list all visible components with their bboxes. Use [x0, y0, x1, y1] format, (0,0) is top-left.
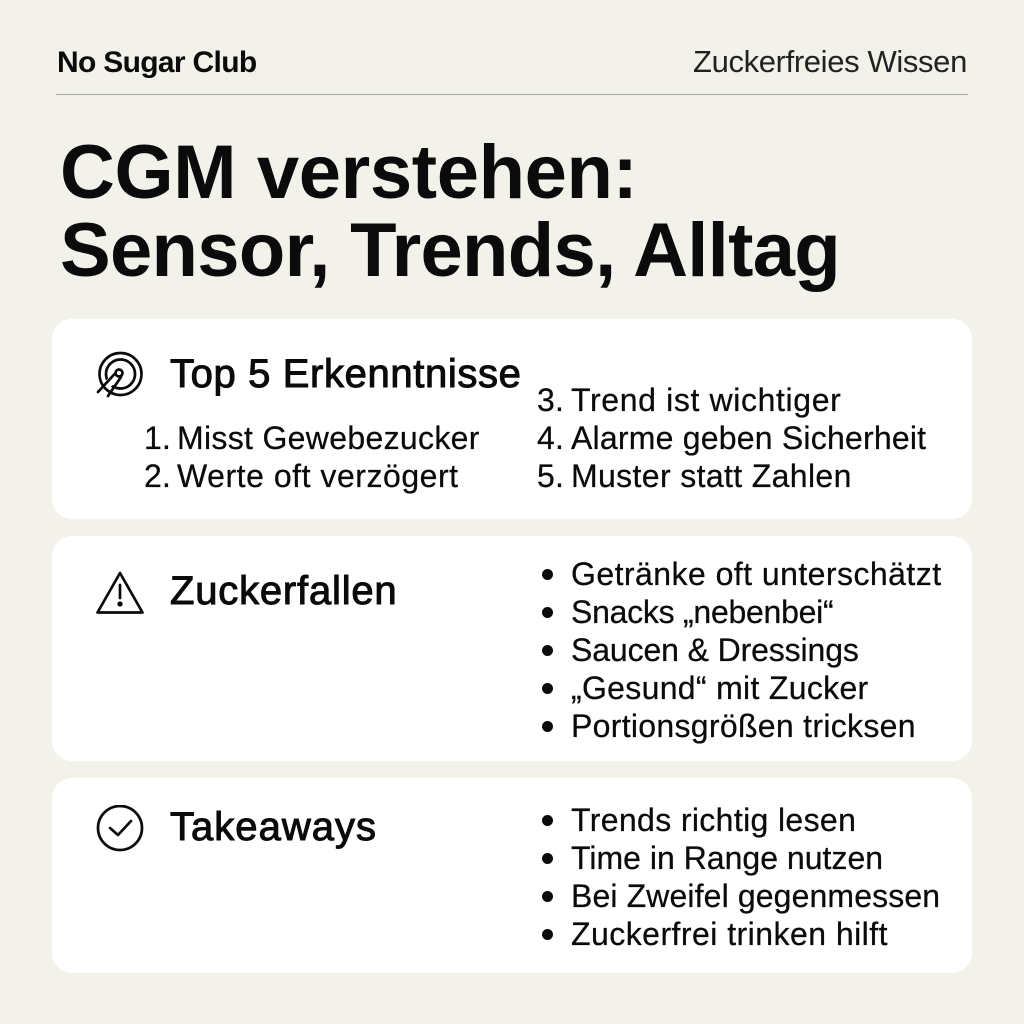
header tagline: Zuckerfreies Wissen	[693, 44, 967, 79]
list left	[144, 420, 480, 494]
item 1: Misst Gewebezucker	[177, 420, 480, 456]
icon: warning triangle	[96, 572, 144, 614]
item 4: 4.	[537, 420, 564, 456]
title: Sensor, Trends, Alltag	[60, 208, 840, 293]
bullet 2: Time in Range nutzen	[571, 840, 883, 876]
list	[542, 556, 942, 744]
bullet 4: „Gesund“ mit Zucker	[571, 670, 869, 706]
bullet 3: Saucen & Dressings	[571, 632, 859, 668]
item 2: Werte oft verzögert	[177, 458, 459, 494]
panel: Takeaways	[52, 778, 972, 973]
bullet 1: Getränke oft unterschätzt	[571, 556, 942, 592]
list right	[537, 382, 926, 494]
bullet 3: Bei Zweifel gegenmessen	[571, 878, 940, 914]
heading: Top 5 Erkenntnisse	[170, 352, 522, 396]
bullet 2: Snacks „nebenbei“	[571, 594, 833, 630]
item 5: Muster statt Zahlen	[571, 458, 852, 494]
heading: Takeaways	[170, 805, 377, 849]
heading: Zuckerfallen	[170, 569, 397, 613]
icon: check circle	[96, 805, 144, 852]
title	[60, 130, 840, 293]
panel: Top 5 Erkenntnisse	[52, 319, 972, 519]
panel: Zuckerfallen	[52, 536, 972, 761]
item 3: 3.	[537, 382, 564, 418]
item 5: 5.	[537, 458, 564, 494]
list	[542, 802, 940, 952]
icon: target	[96, 352, 143, 398]
item 4: Alarme geben Sicherheit	[571, 420, 926, 456]
header rule	[56, 94, 968, 95]
bullet 5: Portionsgrößen tricksen	[571, 708, 916, 744]
item 2: 2.	[144, 458, 171, 494]
header brand: No Sugar Club	[57, 46, 256, 79]
bullet 1: Trends richtig lesen	[571, 802, 856, 838]
item 1: 1.	[144, 420, 171, 456]
item 3: Trend ist wichtiger	[571, 382, 841, 418]
title: CGM verstehen:	[60, 130, 637, 215]
bullet 4: Zuckerfrei trinken hilft	[571, 916, 888, 952]
